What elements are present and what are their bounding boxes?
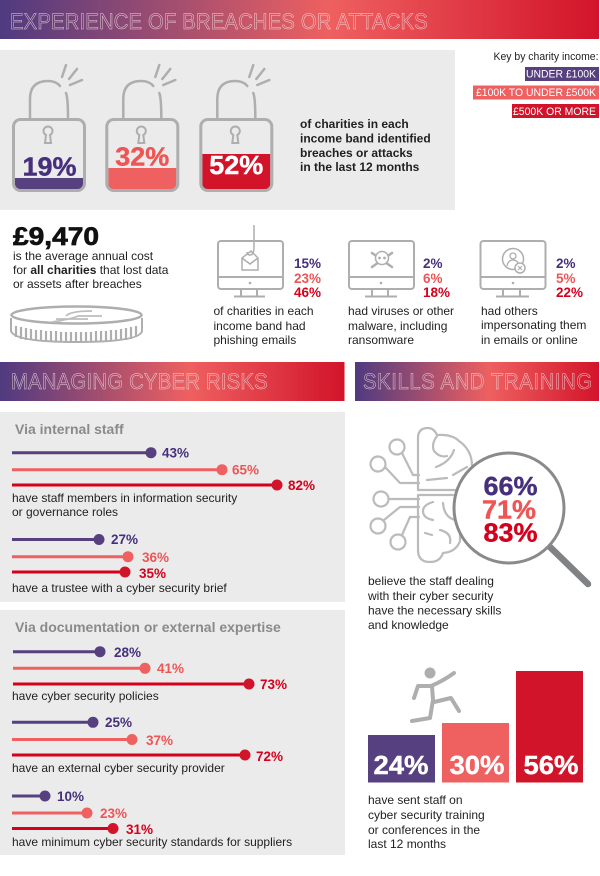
caption: of charities in each [214, 304, 314, 318]
icon: magnifying glass with figures [454, 453, 588, 584]
panel: via internal staff [0, 412, 345, 602]
chart: staff members in security roles: 65% [232, 462, 259, 478]
caption [481, 304, 586, 347]
chart: external provider [12, 715, 283, 775]
figures: 6% [423, 271, 443, 286]
caption [214, 304, 314, 347]
text: breaches description: in the last 12 months [300, 160, 420, 174]
text: skills description [367, 574, 501, 632]
heading: managing cyber risks [0, 362, 344, 401]
chart: trustee with a cyber brief [12, 532, 227, 595]
panel: viruses and malware [348, 241, 454, 347]
chart: trustee with a cyber brief: 27% [111, 532, 138, 547]
chart: external provider: 72% [256, 749, 283, 764]
panel: via documentation or external expertise [0, 610, 345, 855]
panel: breaches by income band [0, 50, 455, 210]
icon: circuit brain [370, 428, 472, 562]
heading: managing cyber risks: MANAGING CYBER RISKS [11, 370, 268, 394]
icon: padlock 19%: 19% [22, 154, 76, 182]
figures [556, 256, 583, 300]
chart: standards for suppliers: 31% [126, 822, 153, 837]
icon: padlock 52% [201, 65, 272, 190]
heading: skills and training [355, 362, 599, 401]
icon: padlock 19% [14, 65, 84, 190]
figures: 2% [423, 256, 443, 271]
legend: key by charity income: £500K OR MORE [513, 106, 596, 118]
legend: key by charity income: £100K TO UNDER £500K [476, 87, 597, 99]
text: breaches description: breaches or attacks [300, 146, 413, 160]
icon: monitor with person [480, 241, 546, 296]
legend: key by charity income [473, 51, 599, 118]
chart: cyber security policies: 28% [114, 645, 141, 660]
stat: average annual cost: for all charities that lost data [13, 263, 169, 277]
text: training description: or conferences in the [368, 823, 480, 837]
icon: magnifying glass with figures: 83% [484, 520, 538, 548]
caption: phishing emails [214, 333, 296, 347]
caption: had viruses or other [348, 304, 454, 318]
figures: 2% [556, 256, 576, 271]
text: breaches description: income band identified [300, 132, 431, 146]
text: training description: last 12 months [368, 837, 446, 851]
text: breaches description [300, 117, 431, 174]
text: training description: cyber security training [368, 808, 485, 822]
chart: trustee with a cyber brief: have a trustee with a cyber security brief [12, 581, 227, 595]
panel: impersonation [480, 241, 586, 347]
chart: staff members in security roles: 43% [162, 446, 189, 460]
text: training description [368, 793, 485, 851]
stat: average annual cost: £9,470 [13, 223, 99, 251]
icon: magnifying glass with figures: 71% [482, 496, 536, 524]
subheading: Via internal staff [15, 421, 124, 437]
text: skills description: have the necessary skills [368, 604, 501, 618]
chart: staff members in security roles [12, 446, 315, 519]
figures: 5% [556, 271, 576, 286]
bar chart: training: 30% [450, 752, 504, 780]
figures: 23% [294, 271, 321, 286]
chart: cyber security policies: 41% [157, 661, 184, 676]
heading: skills and training: SKILLS AND TRAINING [363, 370, 592, 394]
caption: impersonating them [481, 318, 586, 332]
text: skills description: and knowledge [368, 618, 449, 632]
chart: cyber security policies: have cyber security policies [12, 689, 159, 703]
stat: average annual cost [13, 223, 169, 291]
icon: padlock 32%: 32% [115, 144, 169, 172]
bar chart: training: 56% [524, 752, 578, 780]
text: breaches description: of charities in each [300, 117, 409, 131]
caption: ransomware [348, 333, 414, 347]
heading: experience of breaches or attacks: EXPERIENCE OF BREACHES OR ATTACKS [10, 10, 428, 34]
caption [348, 304, 454, 347]
icon: magnifying glass with figures: 66% [484, 473, 538, 501]
icon: coin [11, 306, 142, 342]
caption: income band had [214, 319, 306, 333]
chart: external provider: 37% [146, 733, 173, 748]
bar chart: training [368, 671, 583, 782]
icon: padlock 32% [107, 65, 178, 190]
figures [423, 256, 450, 300]
chart: staff members in security roles: 82% [288, 478, 315, 493]
chart: external provider: 25% [105, 715, 132, 730]
text: skills description: believe the staff dealing [368, 574, 494, 588]
stat: average annual cost: or assets after breaches [13, 277, 142, 291]
chart: trustee with a cyber brief: 35% [139, 566, 166, 581]
chart: standards for suppliers [12, 789, 292, 849]
text: training description: have sent staff on [368, 793, 463, 807]
chart: staff members in security roles: or governance roles [12, 505, 118, 519]
figures [294, 256, 321, 300]
chart: standards for suppliers: 10% [57, 789, 84, 804]
chart: standards for suppliers: 23% [100, 806, 127, 821]
icon: monitor with phishing email [218, 225, 283, 296]
chart: cyber security policies [12, 645, 287, 703]
chart: cyber security policies: 73% [260, 677, 287, 692]
icon: running figure [412, 668, 459, 721]
figures: 18% [423, 285, 450, 300]
caption: had others [481, 304, 538, 318]
text: skills description: with their cyber security [367, 589, 493, 603]
chart: trustee with a cyber brief: 36% [142, 550, 169, 565]
legend: key by charity income: UNDER £100K [526, 69, 597, 81]
heading: experience of breaches or attacks [0, 0, 599, 39]
caption: in emails or online [481, 333, 578, 347]
chart: standards for suppliers: have minimum cyber security standards for suppliers [12, 835, 292, 849]
icon: monitor with skull [349, 241, 414, 296]
chart: external provider: have an external cyber security provider [12, 761, 225, 775]
figures: 15% [294, 256, 321, 271]
figures: 46% [294, 285, 321, 300]
subheading: Via documentation or external expertise [15, 619, 281, 635]
bar chart: training: 24% [374, 752, 428, 780]
stat: average annual cost: is the average annual cost [13, 249, 154, 263]
panel: phishing emails [214, 225, 321, 347]
figures: 22% [556, 285, 583, 300]
icon: padlock 52%: 52% [209, 152, 263, 180]
chart: staff members in security roles: have staff members in information security [12, 491, 237, 505]
caption: malware, including [348, 319, 447, 333]
